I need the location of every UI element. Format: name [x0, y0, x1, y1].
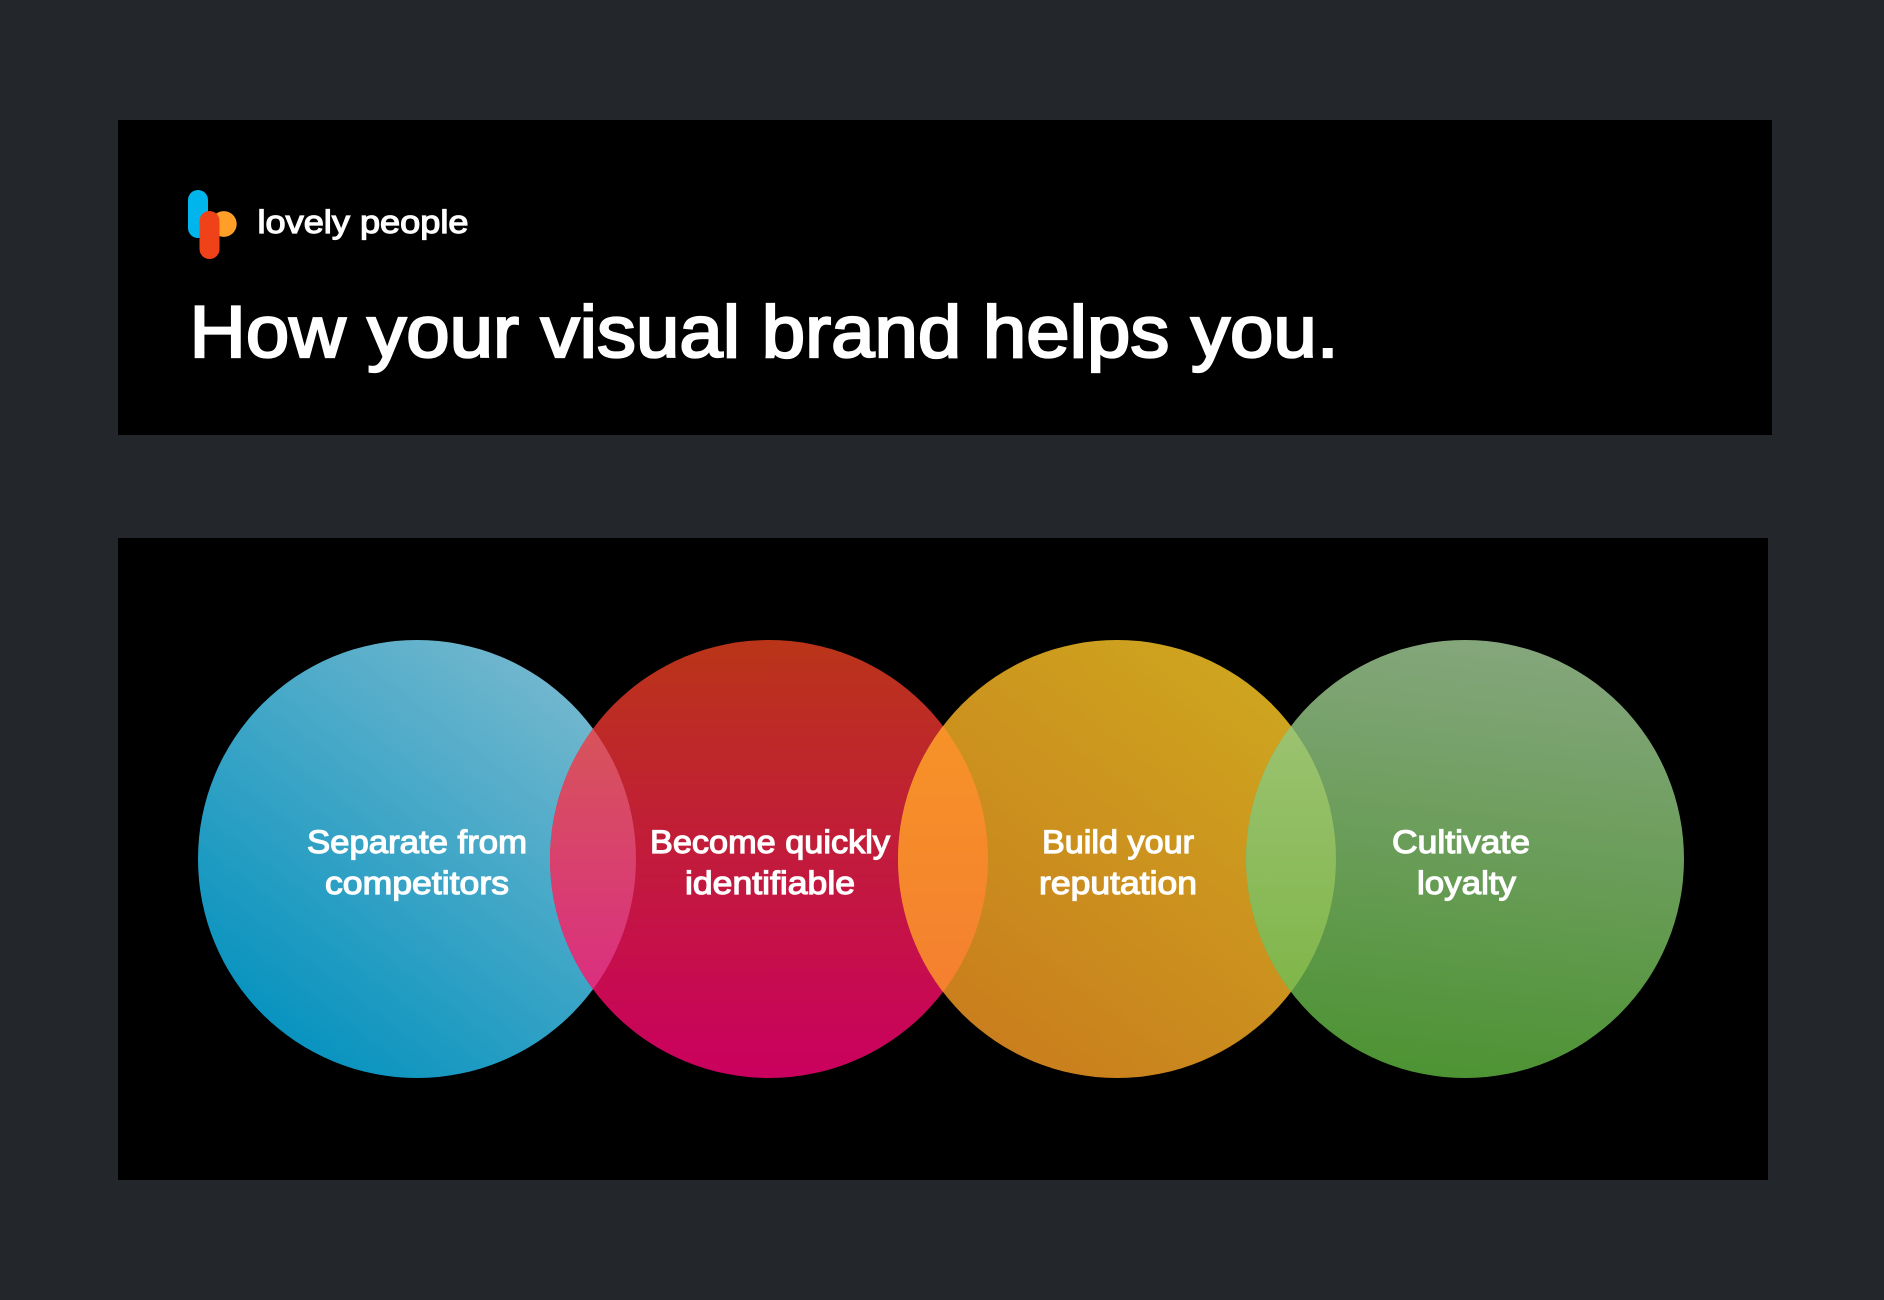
venn circle: green	[1246, 640, 1684, 1078]
label: cultivate loyalty	[1392, 824, 1530, 901]
label: build your reputation	[1039, 824, 1197, 901]
label: separate from competitors	[307, 824, 527, 901]
overlap: blue and red	[550, 728, 636, 990]
label: cultivate loyalty: Cultivate	[1392, 824, 1530, 860]
logo: lovely people	[188, 190, 468, 259]
venn circle: red	[550, 640, 988, 1078]
logo wordmark: lovely people	[258, 204, 468, 240]
overlap: red and orange	[898, 726, 988, 992]
title: How your visual brand helps you.	[190, 292, 1338, 373]
label: become quickly identifiable: Become quickly	[650, 824, 891, 860]
header panel	[118, 120, 1772, 435]
label: cultivate loyalty: loyalty	[1417, 865, 1517, 901]
icon: logo mark	[188, 190, 237, 259]
diagram panel	[118, 538, 1768, 1180]
venn circle: orange	[898, 640, 1336, 1078]
venn circle: blue	[198, 640, 636, 1078]
label: become quickly identifiable	[650, 824, 891, 901]
label: build your reputation: Build your	[1042, 824, 1194, 860]
label: separate from competitors: competitors	[325, 865, 509, 901]
label: separate from competitors: Separate from	[307, 824, 527, 860]
overlap: orange and green	[1246, 726, 1336, 992]
label: build your reputation: reputation	[1039, 865, 1197, 901]
label: become quickly identifiable: identifiable	[685, 865, 855, 901]
